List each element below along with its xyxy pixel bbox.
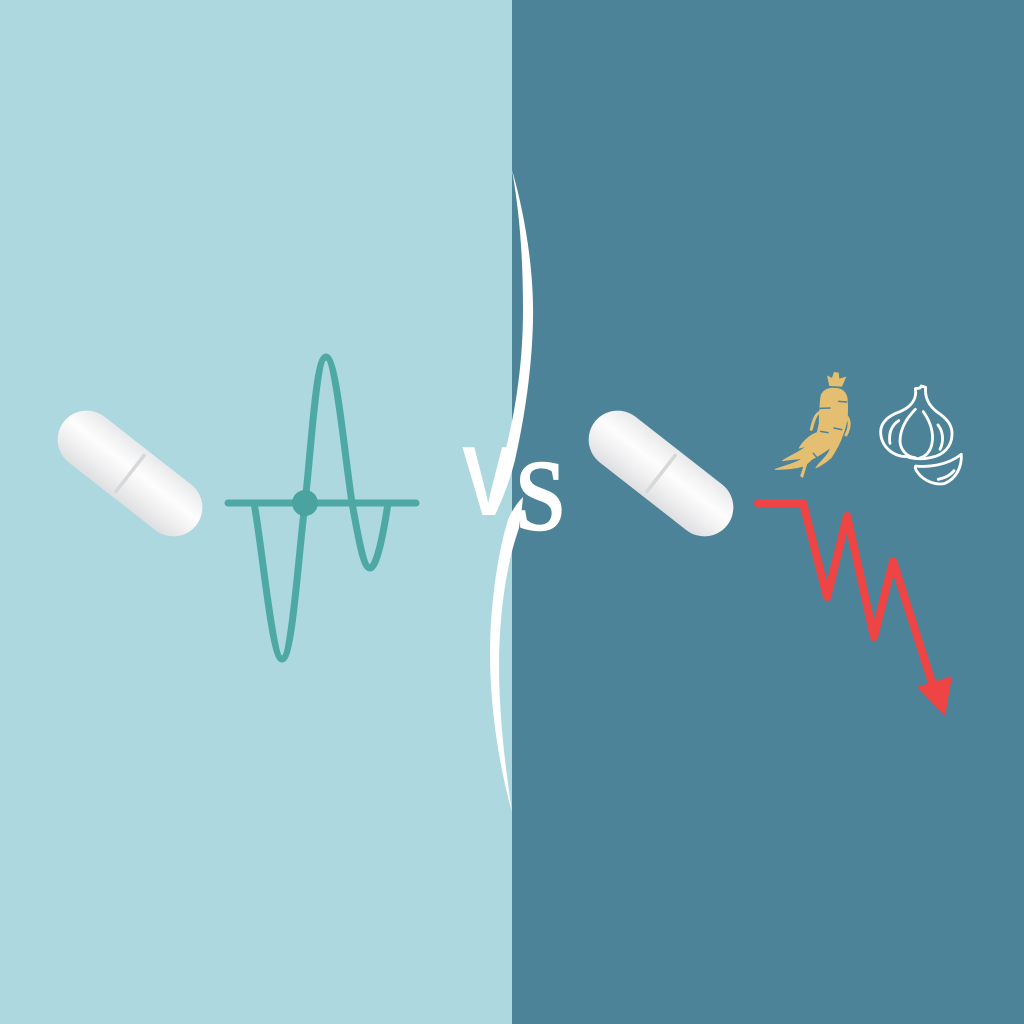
panel: left background	[0, 0, 512, 1024]
heading: VS label: V	[462, 427, 514, 536]
panel: right background	[512, 0, 1024, 1024]
chart: red declining arrow	[758, 503, 952, 716]
heading: VS label	[462, 427, 566, 551]
chart: teal fluctuating wave	[228, 357, 416, 659]
icon: left capsule	[46, 399, 214, 548]
icon: ginseng root	[775, 372, 849, 477]
divider: white curved swoosh	[487, 170, 533, 812]
heading: VS label: S	[515, 439, 566, 551]
icon: garlic bulb and clove	[881, 386, 961, 484]
icon: right capsule	[577, 399, 745, 548]
